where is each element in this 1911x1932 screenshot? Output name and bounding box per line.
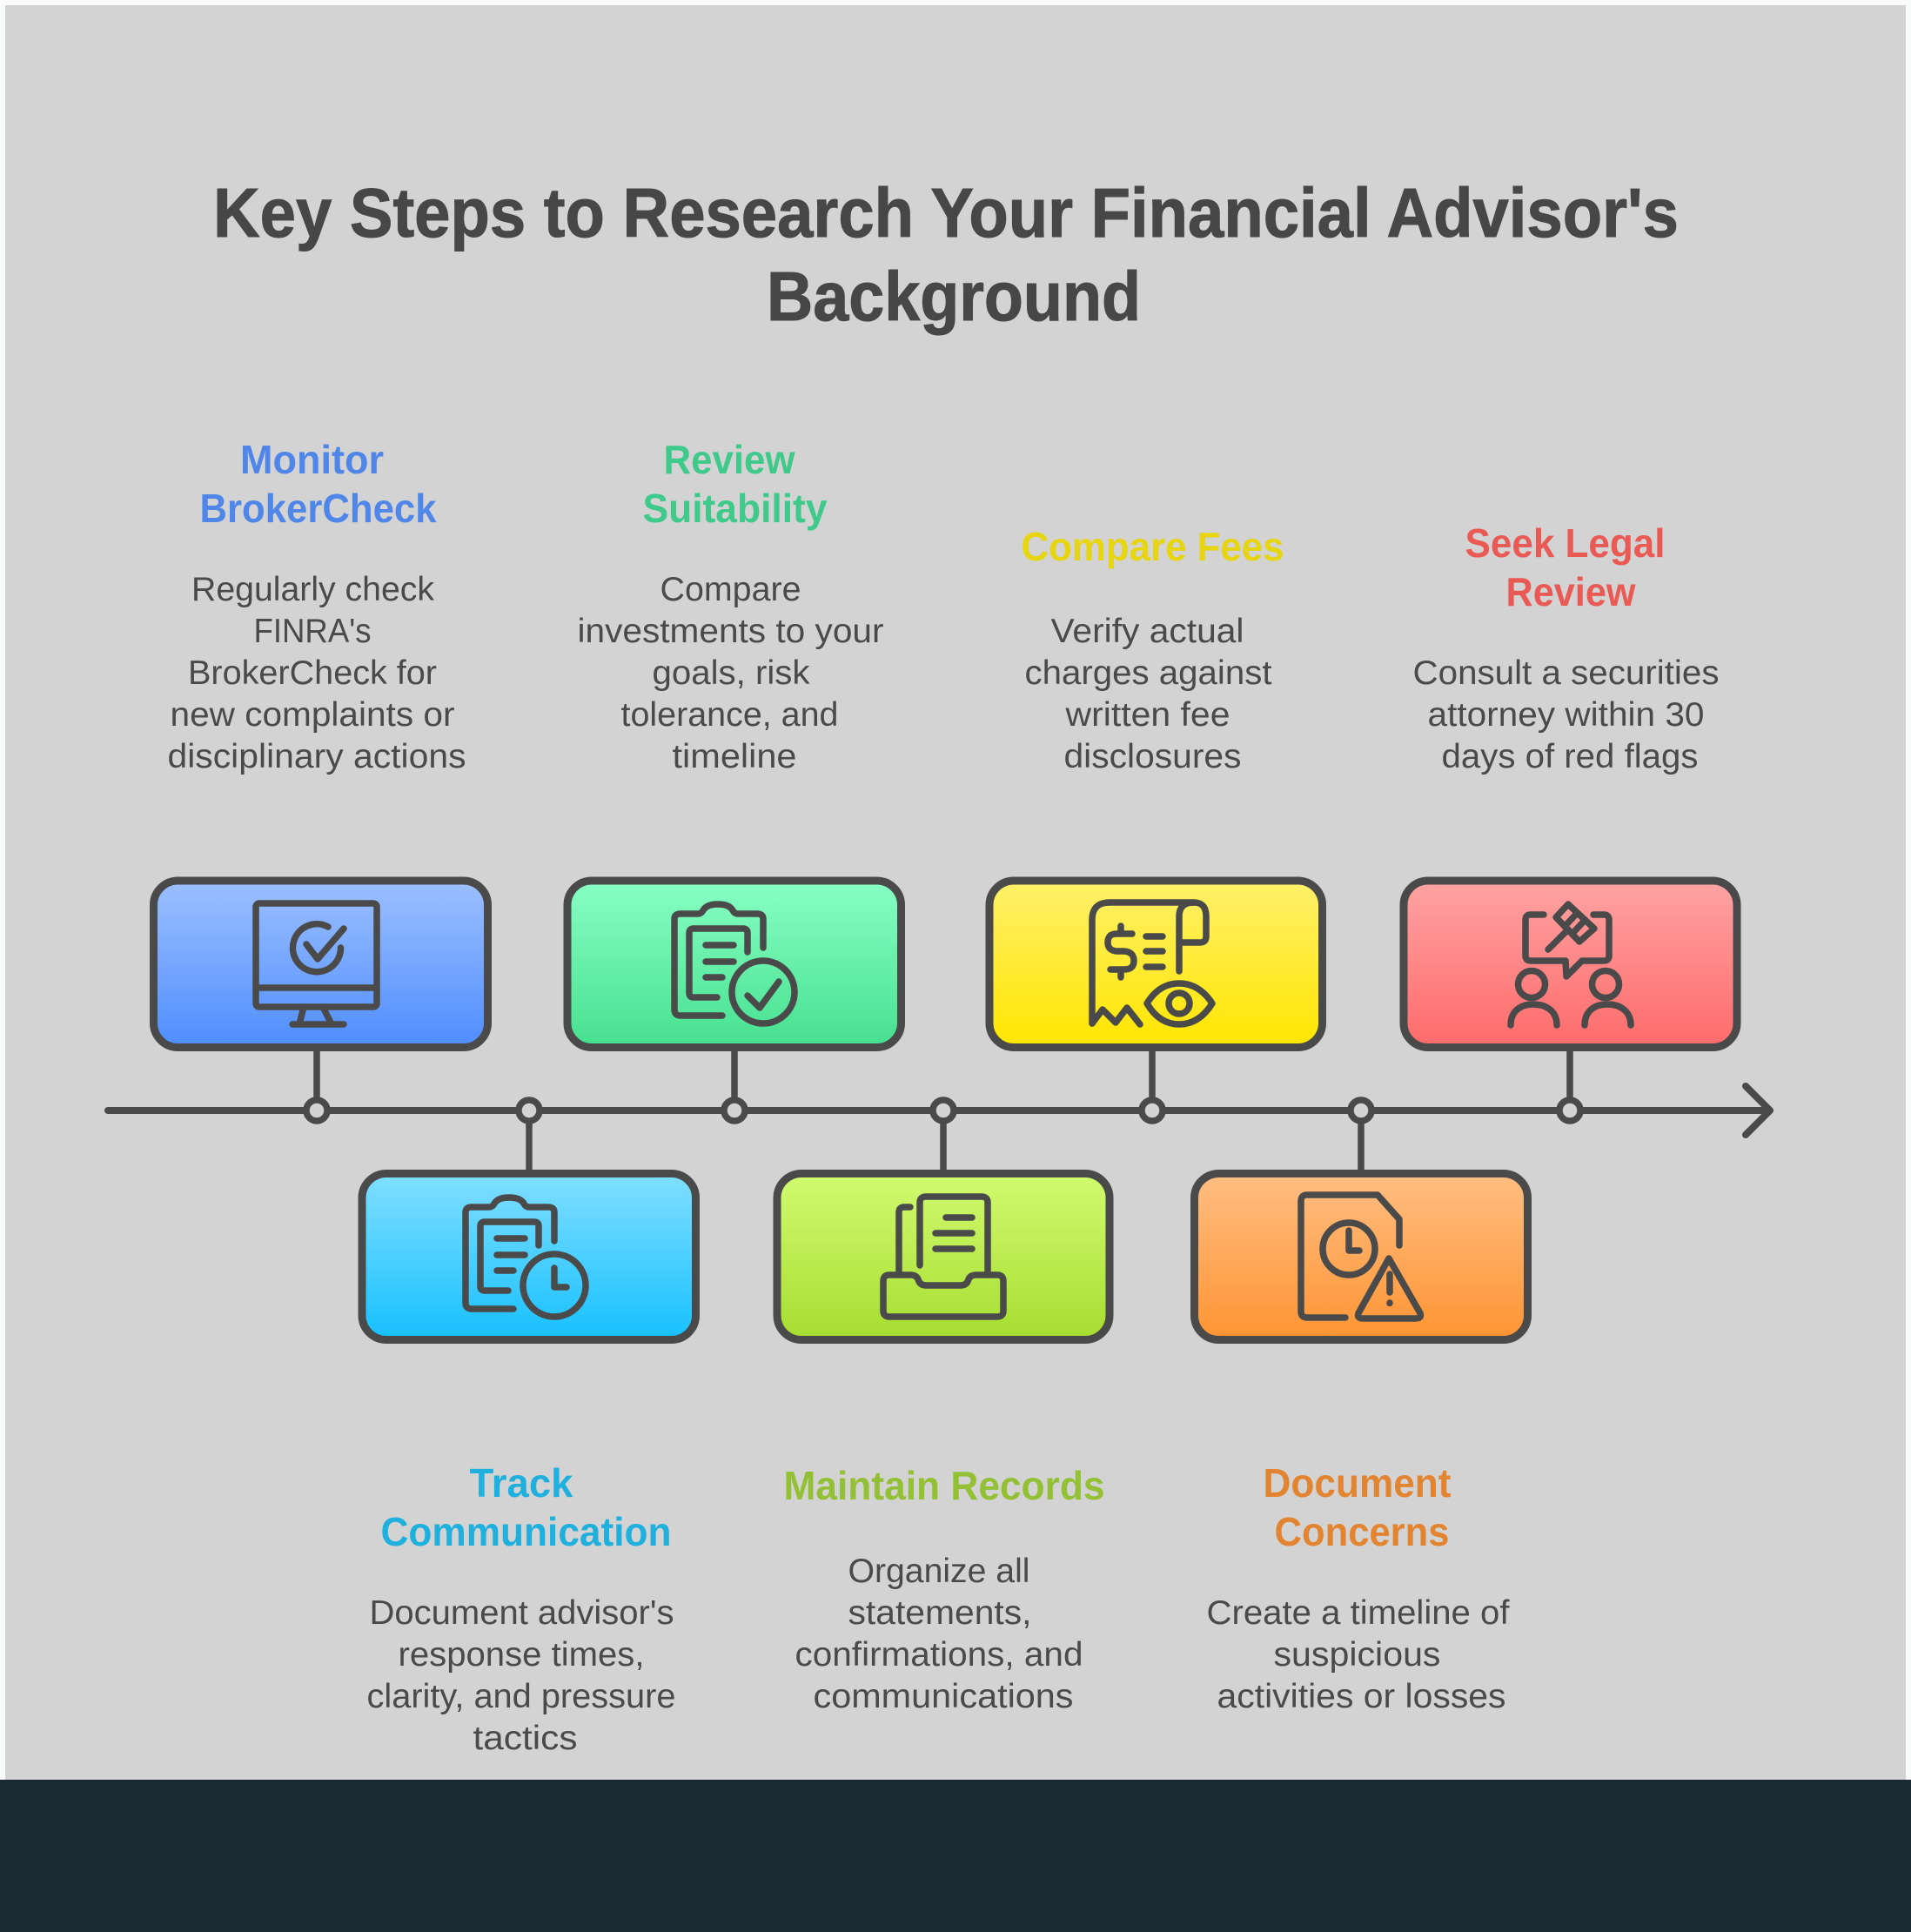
step: Document Concerns <box>1194 1100 1528 1715</box>
description: Document Concerns: activities or losses <box>1217 1678 1505 1715</box>
description: Monitor BrokerCheck: BrokerCheck for <box>188 654 437 692</box>
description: Compare Fees: Verify actual <box>1051 613 1244 650</box>
description: Seek Legal Review: days of red flags <box>1441 738 1699 775</box>
heading: Review Suitability: Suitability <box>642 486 828 531</box>
heading: Seek Legal Review: Seek Legal <box>1465 520 1666 566</box>
description: Maintain Records: statements, <box>848 1594 1032 1632</box>
connector and node <box>933 1100 954 1170</box>
step: Monitor BrokerCheck <box>153 437 487 1121</box>
connector and node <box>1559 1051 1580 1121</box>
heading: Seek Legal Review: Review <box>1505 569 1636 614</box>
footer band <box>0 1780 1911 1932</box>
connector and node <box>306 1051 327 1121</box>
description: Monitor BrokerCheck: disciplinary actions <box>167 738 466 775</box>
title: Key Steps to Research Your Financial Advisor's <box>213 174 1679 252</box>
description: Document Concerns: Create a timeline of <box>1206 1594 1510 1632</box>
connector and node <box>519 1100 540 1170</box>
icon: monitor with check <box>256 903 377 1024</box>
description: Maintain Records <box>795 1553 1083 1715</box>
heading: Document Concerns <box>1264 1460 1452 1554</box>
card: red <box>1404 881 1737 1048</box>
icon: gavel speech bubble with two people <box>1511 904 1631 1025</box>
card: cyan <box>362 1173 696 1340</box>
description: Review Suitability: Compare <box>660 571 801 608</box>
heading: Monitor BrokerCheck <box>200 437 437 531</box>
icon: receipt with eye <box>1092 902 1212 1024</box>
description: Maintain Records: communications <box>813 1678 1074 1715</box>
step: Maintain Records <box>777 1100 1110 1715</box>
step: Track Communication <box>362 1100 696 1757</box>
description: Track Communication: tactics <box>473 1720 578 1757</box>
title: Background <box>767 258 1141 335</box>
description: Track Communication: Document advisor's <box>369 1594 674 1632</box>
description: Track Communication <box>367 1594 675 1757</box>
description: Track Communication: clarity, and pressure <box>367 1678 675 1715</box>
connector and node <box>1142 1051 1163 1121</box>
card: orange <box>1194 1173 1528 1340</box>
description: Review Suitability: investments to your <box>578 613 884 650</box>
title <box>213 174 1679 335</box>
description: Review Suitability: tolerance, and <box>621 696 839 734</box>
step: Review Suitability <box>567 437 902 1121</box>
heading: Seek Legal Review <box>1465 520 1666 614</box>
card: green <box>567 881 902 1048</box>
heading: Document Concerns: Concerns <box>1274 1509 1450 1554</box>
description: Review Suitability <box>578 571 884 775</box>
heading: Monitor BrokerCheck: Monitor <box>240 437 384 482</box>
card: lime <box>777 1173 1110 1340</box>
description: Compare Fees: charges against <box>1025 654 1272 692</box>
connector and node <box>724 1051 745 1121</box>
heading: Review Suitability <box>642 437 828 531</box>
heading: Monitor BrokerCheck: BrokerCheck <box>200 486 437 531</box>
connector and node <box>1351 1100 1371 1170</box>
icon: document with clock and warning <box>1301 1195 1420 1318</box>
heading: Document Concerns: Document <box>1264 1460 1452 1506</box>
icon: document tray <box>883 1197 1003 1317</box>
description: Monitor BrokerCheck <box>167 571 466 775</box>
timeline axis with arrow <box>108 1086 1770 1135</box>
description: Maintain Records: confirmations, and <box>795 1636 1083 1674</box>
description: Review Suitability: goals, risk <box>653 654 810 692</box>
step: Compare Fees <box>989 524 1323 1121</box>
heading: Review Suitability: Review <box>663 437 795 482</box>
description: Monitor BrokerCheck: new complaints or <box>171 696 455 734</box>
description: Monitor BrokerCheck: Regularly check <box>191 571 434 608</box>
description: Seek Legal Review: attorney within 30 <box>1427 696 1704 734</box>
heading: Track Communication: Track <box>470 1460 573 1506</box>
card: blue <box>153 881 487 1048</box>
heading: Track Communication <box>381 1460 672 1554</box>
description: Maintain Records: Organize all <box>848 1553 1030 1590</box>
heading: Maintain Records: Maintain Records <box>783 1463 1105 1508</box>
description: Seek Legal Review <box>1413 654 1720 775</box>
description: Monitor BrokerCheck: FINRA's <box>254 613 371 650</box>
description: Compare Fees: disclosures <box>1063 738 1241 775</box>
description: Compare Fees <box>1025 613 1272 775</box>
icon: clipboard with check <box>674 904 795 1023</box>
description: Seek Legal Review: Consult a securities <box>1413 654 1720 692</box>
description: Document Concerns: suspicious <box>1274 1636 1441 1674</box>
icon: clipboard with clock <box>466 1197 586 1317</box>
description: Compare Fees: written fee <box>1064 696 1230 734</box>
heading: Compare Fees: Compare Fees <box>1022 524 1284 569</box>
step: Seek Legal Review <box>1404 520 1737 1121</box>
description: Track Communication: response times, <box>399 1636 644 1674</box>
description: Review Suitability: timeline <box>672 738 797 775</box>
heading: Track Communication: Communication <box>381 1509 672 1554</box>
card: yellow <box>989 881 1323 1048</box>
description: Document Concerns <box>1206 1594 1510 1715</box>
